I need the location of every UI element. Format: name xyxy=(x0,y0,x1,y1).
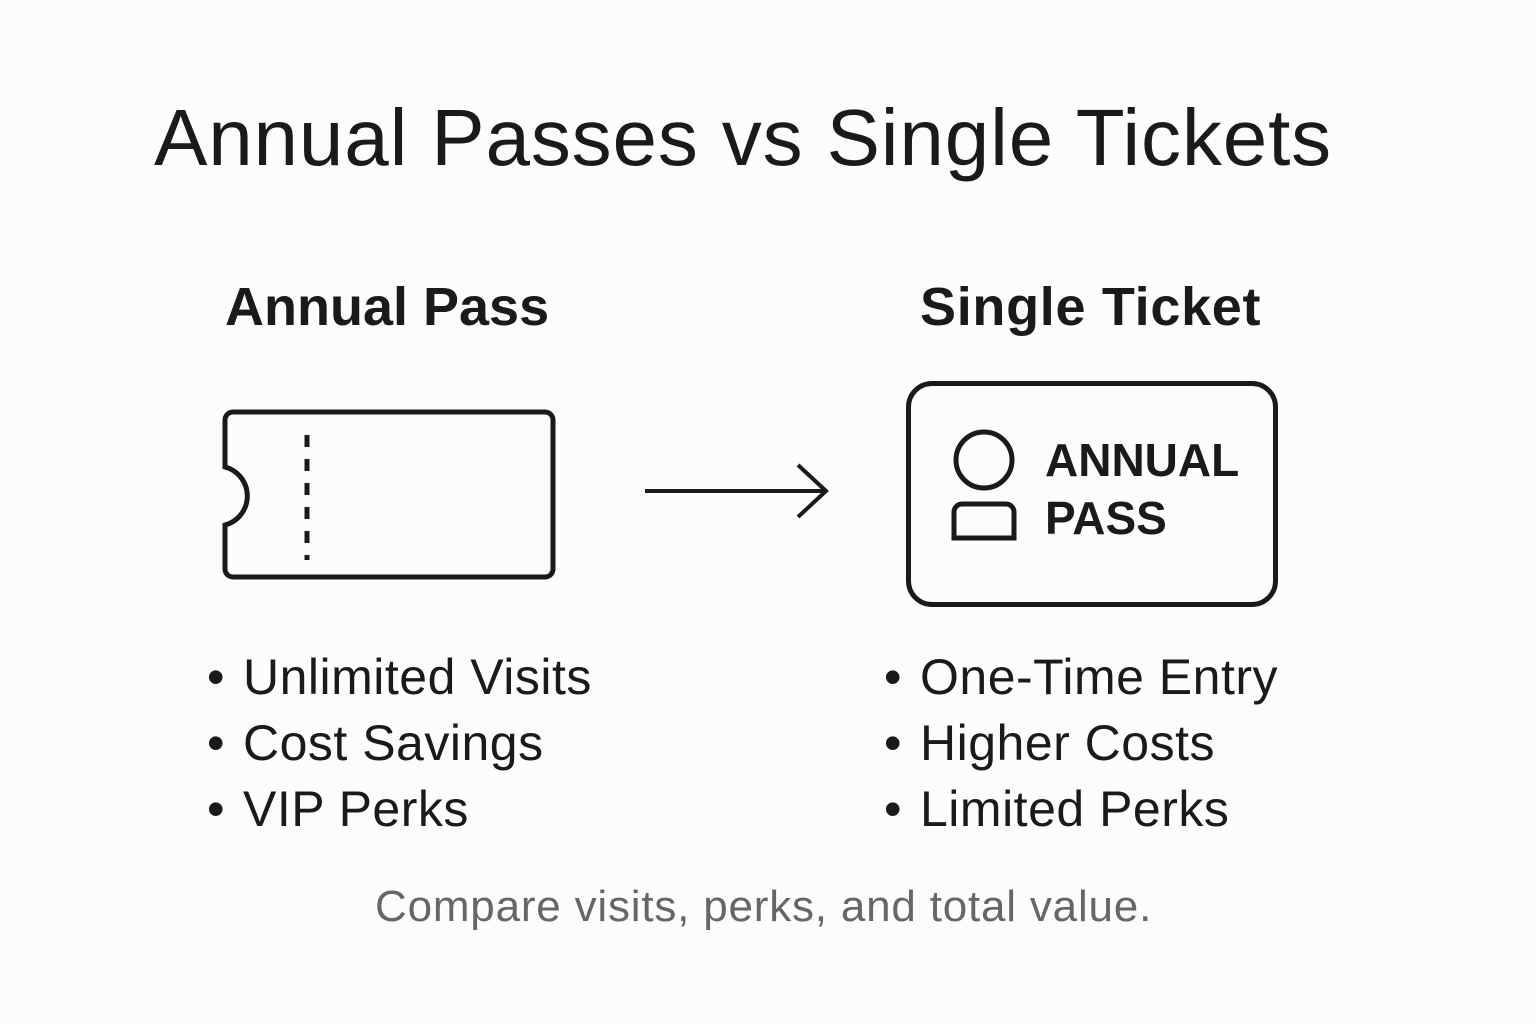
list: single ticket: One-Time Entry xyxy=(920,649,1278,705)
icon: pass card xyxy=(906,381,1278,607)
list: annual pass: • xyxy=(207,715,225,771)
card text: ANNUAL xyxy=(1045,434,1239,486)
list: single ticket: • xyxy=(884,781,902,837)
list: single ticket: Higher Costs xyxy=(920,715,1215,771)
title: Annual Passes vs Single Tickets xyxy=(154,93,1332,182)
icon: person xyxy=(952,430,1016,540)
list: annual pass: VIP Perks xyxy=(243,781,469,837)
list: annual pass xyxy=(207,649,592,837)
heading: annual pass: Annual Pass xyxy=(225,277,549,337)
list: single ticket: • xyxy=(884,649,902,705)
card text: PASS xyxy=(1045,492,1167,544)
list: annual pass: • xyxy=(207,649,225,705)
list: single ticket: • xyxy=(884,715,902,771)
list: annual pass: Unlimited Visits xyxy=(243,649,592,705)
list: single ticket: Limited Perks xyxy=(920,781,1229,837)
list: annual pass: • xyxy=(207,781,225,837)
list: single ticket xyxy=(884,649,1278,837)
arrow xyxy=(645,464,829,518)
heading: single ticket: Single Ticket xyxy=(920,277,1261,337)
list: annual pass: Cost Savings xyxy=(243,715,544,771)
card text xyxy=(1045,434,1239,544)
footer: Compare visits, perks, and total value. xyxy=(375,882,1152,931)
icon: ticket xyxy=(222,410,556,580)
